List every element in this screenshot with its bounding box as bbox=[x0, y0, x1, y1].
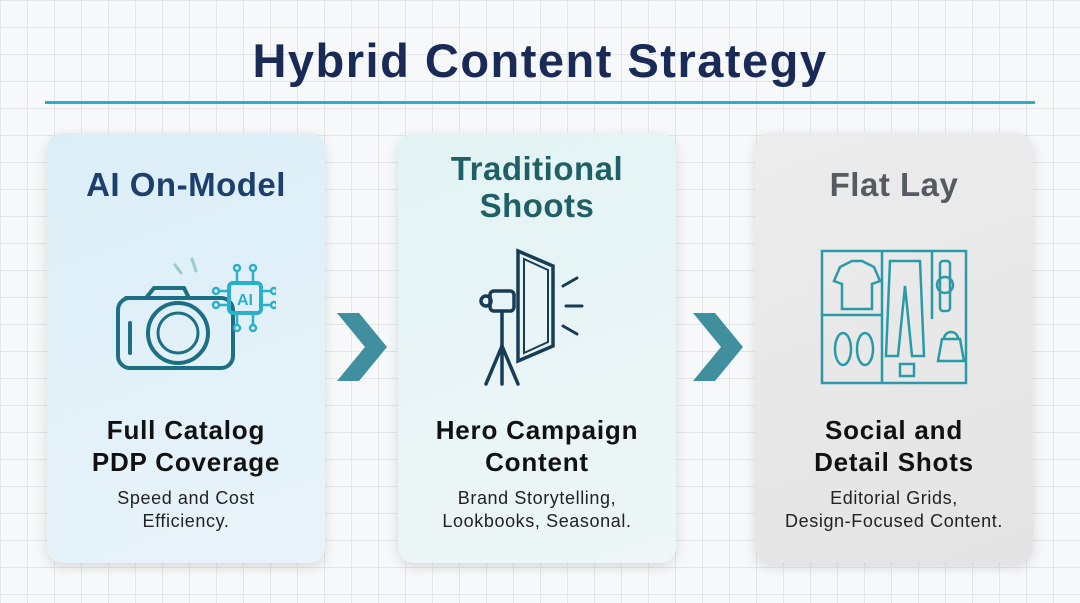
subtitle bbox=[814, 415, 974, 477]
description: Lookbooks, Seasonal. bbox=[442, 511, 632, 531]
subtitle: Full Catalog bbox=[107, 415, 265, 445]
arrow 2 bbox=[693, 313, 743, 381]
subtitle: Detail Shots bbox=[814, 447, 974, 477]
arrow 1 bbox=[337, 313, 387, 381]
subtitle: Content bbox=[485, 447, 589, 477]
title: Hybrid Content Strategy bbox=[252, 34, 828, 87]
panel: Flat Lay bbox=[755, 133, 1033, 563]
subtitle bbox=[436, 415, 638, 477]
heading: Shoots bbox=[480, 187, 594, 224]
description: Editorial Grids, bbox=[830, 488, 958, 508]
heading: Flat Lay bbox=[830, 166, 958, 203]
panel: Traditional Shoots bbox=[398, 133, 676, 563]
description: Speed and Cost bbox=[117, 488, 255, 508]
description bbox=[442, 488, 632, 531]
subtitle: Hero Campaign bbox=[436, 415, 638, 445]
description: Brand Storytelling, bbox=[458, 488, 616, 508]
description: Design-Focused Content. bbox=[785, 511, 1003, 531]
description: Efficiency. bbox=[143, 511, 229, 531]
description bbox=[117, 488, 255, 531]
icon: camera with AI chip: AI bbox=[237, 292, 253, 309]
subtitle: PDP Coverage bbox=[92, 447, 280, 477]
subtitle: Social and bbox=[825, 415, 963, 445]
icon: camera with AI chip bbox=[116, 258, 276, 370]
heading: Traditional bbox=[451, 150, 623, 187]
icon: flat lay grid bbox=[820, 250, 968, 384]
description bbox=[785, 488, 1003, 531]
heading: AI On-Model bbox=[86, 166, 286, 203]
subtitle bbox=[92, 415, 280, 477]
icon: softbox light bbox=[479, 248, 584, 386]
panel: AI On-Model bbox=[47, 133, 325, 563]
heading bbox=[451, 150, 623, 224]
